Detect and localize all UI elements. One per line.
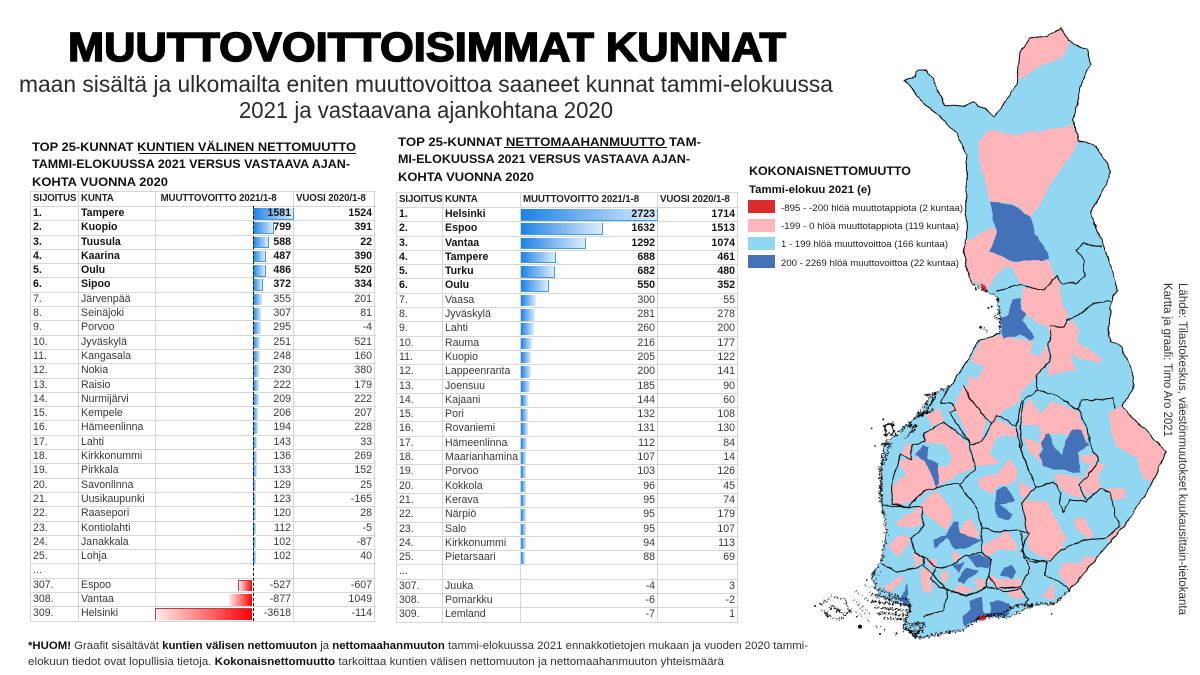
table: nettomaahanmuutto: Vantaa: [445, 237, 479, 249]
subtitle: maan sisältä ja ulkomailta eniten muuttovoittoa saaneet kunnat tammi-elokuussa: [19, 71, 833, 97]
table: nettomaahanmuutto: 281: [637, 308, 655, 320]
table: kuntien välinen nettomuutto: Espoo: [81, 579, 111, 591]
table: nettomaahanmuutto: 307.: [399, 580, 420, 592]
table: nettomaahanmuutto: 45: [723, 480, 735, 492]
table: nettomaahanmuutto: Salo: [445, 523, 466, 535]
table: kuntien välinen nettomuutto: 2.: [33, 221, 42, 233]
table: kuntien välinen nettomuutto: 209: [273, 393, 291, 405]
table: kuntien välinen nettomuutto: 309.: [33, 607, 54, 619]
table: kuntien välinen nettomuutto: 112: [274, 522, 291, 534]
footnote: elokuun tiedot ovat lopullisia tietoja. Kokonaisnettomuutto tarkoittaa kuntien välisen nettomuuton ja nettomaahanmuuton yhteismäärä: [28, 656, 725, 668]
table: nettomaahanmuutto: 55: [723, 294, 735, 306]
table: kuntien välinen nettomuutto: Kempele: [81, 407, 123, 419]
table: nettomaahanmuutto: Kuopio: [445, 351, 478, 363]
table: nettomaahanmuutto: 96: [643, 480, 655, 492]
map: small islands: [814, 288, 1052, 635]
table: nettomaahanmuutto: Kirkkonummi: [445, 537, 506, 549]
table: nettomaahanmuutto: 688: [637, 251, 655, 263]
heading: right table: MI-ELOKUUSSA 2021 VERSUS VASTAAVA AJAN-: [398, 152, 690, 166]
table: nettomaahanmuutto: 13.: [399, 380, 414, 392]
table: nettomaahanmuutto: 107: [717, 523, 735, 535]
table: nettomaahanmuutto: 309.: [399, 608, 420, 620]
table: kuntien välinen nettomuutto: 19.: [33, 464, 48, 476]
table: kuntien välinen nettomuutto: 28: [360, 507, 372, 519]
table: kuntien välinen nettomuutto: 102: [273, 536, 291, 548]
table: nettomaahanmuutto: Kokkola: [445, 480, 483, 492]
table: nettomaahanmuutto: Tampere: [445, 251, 488, 263]
table: nettomaahanmuutto: 25.: [399, 551, 414, 563]
table: nettomaahanmuutto: Lemland: [445, 608, 486, 620]
table: nettomaahanmuutto: 5.: [399, 265, 408, 277]
table: nettomaahanmuutto: 22.: [399, 508, 414, 520]
table: kuntien välinen nettomuutto: [30, 191, 376, 622]
table: nettomaahanmuutto: Turku: [445, 265, 474, 277]
table: nettomaahanmuutto: Pomarkku: [445, 594, 493, 606]
table: kuntien välinen nettomuutto: ...: [33, 564, 42, 576]
table: nettomaahanmuutto: 113: [718, 537, 735, 549]
heading: left table: TAMMI-ELOKUUSSA 2021 VERSUS VASTAAVA AJAN-: [32, 157, 350, 171]
table: kuntien välinen nettomuutto: Kaarina: [81, 250, 120, 262]
table: kuntien välinen nettomuutto: 23.: [33, 522, 48, 534]
table: kuntien välinen nettomuutto: 222: [354, 393, 372, 405]
table: kuntien välinen nettomuutto: -5: [363, 522, 372, 534]
map: pink municipalities (muuttotappio): [883, 27, 1167, 600]
table: kuntien välinen nettomuutto: -877: [270, 593, 291, 605]
table: nettomaahanmuutto: 1074: [711, 237, 735, 249]
table: nettomaahanmuutto: 12.: [399, 365, 414, 377]
table: nettomaahanmuutto: Hämeenlinna: [445, 437, 507, 449]
table: kuntien välinen nettomuutto: 4.: [33, 250, 42, 262]
table: kuntien välinen nettomuutto: Jyväskylä: [81, 336, 127, 348]
table: kuntien välinen nettomuutto: Hämeenlinna: [81, 421, 143, 433]
table: kuntien välinen nettomuutto: 228: [354, 421, 372, 433]
table: nettomaahanmuutto: 95: [643, 508, 655, 520]
source text (vertical): Kartta ja graafi: Timo Aro 2021: [1161, 283, 1173, 437]
table: nettomaahanmuutto: 480: [717, 265, 735, 277]
table: nettomaahanmuutto: 10.: [399, 337, 414, 349]
table: nettomaahanmuutto: 200: [637, 365, 655, 377]
table: kuntien välinen nettomuutto: 40: [360, 550, 372, 562]
table: nettomaahanmuutto: 200: [717, 322, 735, 334]
map: municipality fills: [872, 27, 1167, 638]
table: nettomaahanmuutto: 205: [637, 351, 655, 363]
table: nettomaahanmuutto: 1632: [631, 222, 655, 234]
table: kuntien välinen nettomuutto: 81: [360, 307, 372, 319]
table: kuntien välinen nettomuutto: 21.: [33, 493, 48, 505]
table: kuntien välinen nettomuutto: 207: [354, 407, 372, 419]
table: kuntien välinen nettomuutto: 372: [273, 278, 291, 290]
map: base light blue: [872, 27, 1167, 638]
table: nettomaahanmuutto: 88: [643, 551, 655, 563]
table: nettomaahanmuutto: 2.: [399, 222, 408, 234]
legend: [748, 164, 963, 269]
table: kuntien välinen nettomuutto: 24.: [33, 536, 48, 548]
subtitle: [19, 71, 833, 123]
table: kuntien välinen nettomuutto: 133: [273, 464, 291, 476]
table: nettomaahanmuutto: 131: [637, 422, 655, 434]
legend subtitle: Tammi-elokuu 2021 (e): [749, 184, 871, 196]
table: kuntien välinen nettomuutto: Kuopio: [81, 221, 117, 233]
table: nettomaahanmuutto: 14.: [399, 394, 414, 406]
table: nettomaahanmuutto: 278: [717, 308, 735, 320]
table: nettomaahanmuutto: 141: [717, 365, 735, 377]
table: kuntien välinen nettomuutto: Kontiolahti: [81, 522, 130, 534]
table: kuntien välinen nettomuutto: 799: [273, 221, 291, 233]
table: kuntien välinen nettomuutto: 1524: [348, 207, 372, 219]
table: kuntien välinen nettomuutto: 1049: [348, 593, 372, 605]
table: kuntien välinen nettomuutto: 520: [354, 264, 372, 276]
table: kuntien välinen nettomuutto: 136: [273, 450, 291, 462]
table: nettomaahanmuutto: 144: [637, 394, 655, 406]
table: kuntien välinen nettomuutto: 25.: [33, 550, 48, 562]
table: nettomaahanmuutto: VUOSI 2020/1-8: [660, 194, 730, 205]
table: nettomaahanmuutto: Pori: [445, 408, 464, 420]
table: nettomaahanmuutto: 179: [717, 508, 735, 520]
table: kuntien välinen nettomuutto: 8.: [33, 307, 42, 319]
map: red municipalities (Helsinki, Vaasa): [977, 283, 988, 620]
table: kuntien välinen nettomuutto: 248: [273, 350, 291, 362]
heading: right table: TOP 25-KUNNAT NETTOMAAHANMUUTTO TAM-: [398, 135, 701, 149]
table: kuntien välinen nettomuutto: MUUTTOVOITTO 2021/1-8: [161, 193, 277, 204]
table: kuntien välinen nettomuutto: 521: [354, 336, 372, 348]
table: nettomaahanmuutto: -2: [726, 594, 735, 606]
table: nettomaahanmuutto: 3: [729, 580, 735, 592]
table: kuntien välinen nettomuutto: Sipoo: [81, 278, 110, 290]
table: kuntien välinen nettomuutto: Lohja: [81, 550, 107, 562]
table: kuntien välinen nettomuutto: 588: [273, 236, 291, 248]
legend item: dark blue: [748, 255, 959, 269]
table: nettomaahanmuutto: Juuka: [445, 580, 473, 592]
table: kuntien välinen nettomuutto: 13.: [33, 379, 48, 391]
table: kuntien välinen nettomuutto: 391: [354, 221, 372, 233]
table: nettomaahanmuutto: 177: [717, 337, 735, 349]
table: nettomaahanmuutto: Kerava: [445, 494, 479, 506]
table: nettomaahanmuutto: 84: [723, 437, 735, 449]
table: kuntien välinen nettomuutto: Kirkkonummi: [81, 450, 142, 462]
table: kuntien välinen nettomuutto: 307: [273, 307, 291, 319]
table: nettomaahanmuutto: 126: [717, 465, 735, 477]
table: kuntien välinen nettomuutto: 390: [354, 250, 372, 262]
table: nettomaahanmuutto: 74: [723, 494, 735, 506]
table: kuntien välinen nettomuutto: 251: [273, 336, 291, 348]
table: nettomaahanmuutto: Lappeenranta: [445, 365, 510, 377]
table: kuntien välinen nettomuutto: 25: [360, 479, 372, 491]
table: nettomaahanmuutto: 69: [723, 551, 735, 563]
table: nettomaahanmuutto: Oulu: [445, 279, 469, 291]
table: kuntien välinen nettomuutto: 10.: [33, 336, 48, 348]
table: kuntien välinen nettomuutto: 380: [354, 364, 372, 376]
table: kuntien välinen nettomuutto: 5.: [33, 264, 42, 276]
table: kuntien välinen nettomuutto: Nurmijärvi: [81, 393, 129, 405]
table: nettomaahanmuutto: 1.: [399, 208, 408, 220]
map: regional and national borders: [882, 27, 1167, 617]
table: nettomaahanmuutto: 682: [637, 265, 655, 277]
table: nettomaahanmuutto: Rauma: [445, 337, 479, 349]
legend item: red: [748, 200, 963, 214]
table: nettomaahanmuutto: 1714: [711, 208, 735, 220]
table: kuntien välinen nettomuutto: 230: [273, 364, 291, 376]
table: nettomaahanmuutto: Lahti: [445, 322, 468, 334]
table: nettomaahanmuutto: 2723: [631, 208, 655, 220]
table: nettomaahanmuutto: 16.: [399, 422, 414, 434]
heading: left table: KOHTA VUONNA 2020: [32, 175, 168, 189]
table: nettomaahanmuutto: 9.: [399, 322, 408, 334]
table: nettomaahanmuutto: Närpiö: [445, 508, 476, 520]
heading: right table: KOHTA VUONNA 2020: [398, 170, 534, 184]
table: kuntien välinen nettomuutto: Janakkala: [81, 536, 129, 548]
table: kuntien välinen nettomuutto: 12.: [33, 364, 48, 376]
table: nettomaahanmuutto: Pietarsaari: [445, 551, 496, 563]
table: kuntien välinen nettomuutto: -3618: [264, 607, 291, 619]
table: nettomaahanmuutto: 24.: [399, 537, 414, 549]
table: kuntien välinen nettomuutto: Nokia: [81, 364, 108, 376]
table: kuntien välinen nettomuutto: 206: [273, 407, 291, 419]
table: nettomaahanmuutto: 107: [637, 451, 655, 463]
table: nettomaahanmuutto: Joensuu: [445, 380, 485, 392]
table: kuntien välinen nettomuutto: 22.: [33, 507, 48, 519]
table: kuntien välinen nettomuutto: Kangasala: [81, 350, 131, 362]
table: nettomaahanmuutto: 19.: [399, 465, 414, 477]
table: nettomaahanmuutto: ...: [399, 565, 408, 577]
table: nettomaahanmuutto: 11.: [399, 351, 413, 363]
footnote: *HUOM! Graafit sisältävät kuntien välisen nettomuuton ja nettomaahanmuuton tammi-elokuussa 2021 ennakkotietojen mukaan ja vuoden 2020 tammi-: [28, 640, 808, 652]
map: dark blue municipalities (muuttovoitto): [900, 202, 1088, 627]
table: kuntien välinen nettomuutto: Järvenpää: [81, 293, 130, 305]
table: kuntien välinen nettomuutto: 355: [273, 293, 291, 305]
table: kuntien välinen nettomuutto: 33: [360, 436, 372, 448]
table: nettomaahanmuutto: Jyväskylä: [445, 308, 491, 320]
table: kuntien välinen nettomuutto: -165: [351, 493, 372, 505]
table: nettomaahanmuutto: 23.: [399, 523, 414, 535]
table: kuntien välinen nettomuutto: 143: [273, 436, 291, 448]
table: nettomaahanmuutto: [396, 192, 739, 623]
table: kuntien välinen nettomuutto: 15.: [33, 407, 48, 419]
table: kuntien välinen nettomuutto: Tampere: [81, 207, 124, 219]
legend item: red: -895 - -200 hlöä muuttotappiota (2 kuntaa): [781, 203, 963, 214]
table: kuntien välinen nettomuutto: -114: [352, 607, 372, 619]
table: kuntien välinen nettomuutto: 20.: [33, 479, 48, 491]
table: kuntien välinen nettomuutto: 269: [354, 450, 372, 462]
table: nettomaahanmuutto: 260: [637, 322, 655, 334]
table: kuntien välinen nettomuutto: 152: [354, 464, 372, 476]
table: kuntien välinen nettomuutto: Pirkkala: [81, 464, 119, 476]
legend title: KOKONAISNETTOMUUTTO: [749, 164, 911, 178]
table: nettomaahanmuutto: 122: [717, 351, 735, 363]
table: nettomaahanmuutto: 8.: [399, 308, 408, 320]
table: kuntien välinen nettomuutto: 129: [273, 479, 291, 491]
map: coast and archipelago: [820, 283, 1070, 638]
table: kuntien välinen nettomuutto: 11.: [33, 350, 47, 362]
table: kuntien välinen nettomuutto: -4: [363, 321, 372, 333]
table: kuntien välinen nettomuutto: 295: [273, 321, 291, 333]
table: kuntien välinen nettomuutto: 3.: [33, 236, 42, 248]
table: nettomaahanmuutto: 185: [637, 380, 655, 392]
table: nettomaahanmuutto: 1292: [631, 237, 655, 249]
heading: left table: TOP 25-KUNNAT KUNTIEN VÄLINEN NETTOMUUTTO: [32, 139, 356, 154]
legend item: light blue: 1 - 199 hlöä muuttovoittoa (166 kuntaa): [781, 239, 948, 250]
table: nettomaahanmuutto: 3.: [399, 237, 408, 249]
table: kuntien välinen nettomuutto: Uusikaupunki: [81, 493, 145, 505]
table: nettomaahanmuutto: KUNTA: [445, 194, 478, 205]
table: kuntien välinen nettomuutto: KUNTA: [81, 193, 114, 204]
table: kuntien välinen nettomuutto: 160: [354, 350, 372, 362]
table: kuntien välinen nettomuutto: 201: [354, 293, 372, 305]
title: MUUTTOVOITTOISIMMAT KUNNAT: [68, 24, 786, 70]
table: nettomaahanmuutto: Kajaani: [445, 394, 480, 406]
table: nettomaahanmuutto: 95: [643, 494, 655, 506]
table: kuntien välinen nettomuutto: Seinäjoki: [81, 307, 124, 319]
table: kuntien välinen nettomuutto: 6.: [33, 278, 42, 290]
table: kuntien välinen nettomuutto: SIJOITUS: [33, 193, 76, 204]
table: nettomaahanmuutto: -7: [646, 608, 655, 620]
heading: left table: [32, 139, 356, 189]
table: nettomaahanmuutto: MUUTTOVOITTO 2021/1-8: [523, 194, 639, 205]
table: nettomaahanmuutto: 130: [717, 422, 735, 434]
table: kuntien välinen nettomuutto: Raasepori: [81, 507, 129, 519]
table: kuntien välinen nettomuutto: VUOSI 2020/1-8: [296, 193, 366, 204]
table: nettomaahanmuutto: 95: [643, 523, 655, 535]
table: kuntien välinen nettomuutto: Lahti: [81, 436, 104, 448]
legend item: dark blue: 200 - 2269 hlöä muuttovoittoa (22 kuntaa): [781, 258, 959, 269]
table: kuntien välinen nettomuutto: 222: [273, 379, 291, 391]
table: nettomaahanmuutto: 132: [637, 408, 655, 420]
table: nettomaahanmuutto: Vaasa: [445, 294, 474, 306]
table: kuntien välinen nettomuutto: 22: [360, 236, 372, 248]
table: nettomaahanmuutto: 300: [637, 294, 655, 306]
legend item: pink: [748, 219, 959, 232]
table: nettomaahanmuutto: -4: [646, 580, 655, 592]
table: nettomaahanmuutto: 15.: [399, 408, 414, 420]
table: nettomaahanmuutto: Rovaniemi: [445, 422, 495, 434]
table: nettomaahanmuutto: 6.: [399, 279, 408, 291]
table: kuntien välinen nettomuutto: 102: [273, 550, 291, 562]
table: nettomaahanmuutto: 17.: [399, 437, 414, 449]
table: nettomaahanmuutto: -6: [646, 594, 655, 606]
table: nettomaahanmuutto: 1513: [711, 222, 735, 234]
table: kuntien välinen nettomuutto: 486: [273, 264, 291, 276]
table: kuntien välinen nettomuutto: 17.: [33, 436, 48, 448]
table: kuntien välinen nettomuutto: Savonlinna: [81, 479, 133, 491]
table: kuntien välinen nettomuutto: 194: [273, 421, 291, 433]
table: nettomaahanmuutto: 112: [638, 437, 655, 449]
table: nettomaahanmuutto: 18.: [399, 451, 414, 463]
table: kuntien välinen nettomuutto: Porvoo: [81, 321, 115, 333]
table: kuntien välinen nettomuutto: 308.: [33, 593, 54, 605]
table: kuntien välinen nettomuutto: 487: [273, 250, 291, 262]
table: nettomaahanmuutto: 94: [643, 537, 655, 549]
heading: right table: [398, 135, 701, 184]
subtitle: 2021 ja vastaavana ajankohtana 2020: [239, 97, 613, 123]
source text (vertical): Lähde: Tilastokeskus, väestönmuutokset kuukausittain-tietokanta: [1176, 283, 1188, 616]
table: nettomaahanmuutto: 308.: [399, 594, 420, 606]
legend item: pink: -199 - 0 hlöä muuttotappiota (119 kuntaa): [781, 221, 959, 232]
bar chart axis: left table zero line: [253, 206, 254, 621]
table: nettomaahanmuutto: 461: [717, 251, 735, 263]
table: kuntien välinen nettomuutto: 120: [273, 507, 291, 519]
table: kuntien välinen nettomuutto: 1581: [267, 207, 291, 219]
table: kuntien välinen nettomuutto: 9.: [33, 321, 42, 333]
table: kuntien välinen nettomuutto: Helsinki: [81, 607, 118, 619]
table: kuntien välinen nettomuutto: 1.: [33, 207, 42, 219]
table: nettomaahanmuutto: 90: [723, 380, 735, 392]
table: kuntien välinen nettomuutto: 16.: [33, 421, 48, 433]
table: nettomaahanmuutto: Porvoo: [445, 465, 479, 477]
table: nettomaahanmuutto: 550: [637, 279, 655, 291]
table: nettomaahanmuutto: 1: [729, 608, 735, 620]
table: nettomaahanmuutto: 103: [637, 465, 655, 477]
table: nettomaahanmuutto: 216: [637, 337, 655, 349]
table: kuntien välinen nettomuutto: Tuusula: [81, 236, 121, 248]
table: nettomaahanmuutto: 60: [723, 394, 735, 406]
table: kuntien välinen nettomuutto: Oulu: [81, 264, 105, 276]
table: kuntien välinen nettomuutto: 14.: [33, 393, 48, 405]
table: kuntien välinen nettomuutto: 307.: [33, 579, 54, 591]
table: kuntien välinen nettomuutto: Vantaa: [81, 593, 114, 605]
table: kuntien välinen nettomuutto: 123: [273, 493, 291, 505]
table: nettomaahanmuutto: 352: [717, 279, 735, 291]
table: kuntien välinen nettomuutto: -87: [357, 536, 372, 548]
table: kuntien välinen nettomuutto: 18.: [33, 450, 48, 462]
table: nettomaahanmuutto: Espoo: [445, 222, 477, 234]
table: nettomaahanmuutto: 20.: [399, 480, 414, 492]
table: nettomaahanmuutto: SIJOITUS: [399, 194, 442, 205]
table: kuntien välinen nettomuutto: 7.: [33, 293, 42, 305]
table: kuntien välinen nettomuutto: 179: [354, 379, 372, 391]
table: nettomaahanmuutto: 4.: [399, 251, 408, 263]
table: kuntien välinen nettomuutto: 334: [354, 278, 372, 290]
table: nettomaahanmuutto: 108: [717, 408, 735, 420]
table: nettomaahanmuutto: 7.: [399, 294, 408, 306]
table: nettomaahanmuutto: Maarianhamina: [445, 451, 518, 463]
table: kuntien välinen nettomuutto: -607: [351, 579, 372, 591]
table: kuntien välinen nettomuutto: -527: [270, 579, 291, 591]
table: kuntien välinen nettomuutto: Raisio: [81, 379, 110, 391]
table: nettomaahanmuutto: Helsinki: [445, 208, 486, 220]
table: nettomaahanmuutto: 14: [723, 451, 735, 463]
table: nettomaahanmuutto: 21.: [399, 494, 414, 506]
